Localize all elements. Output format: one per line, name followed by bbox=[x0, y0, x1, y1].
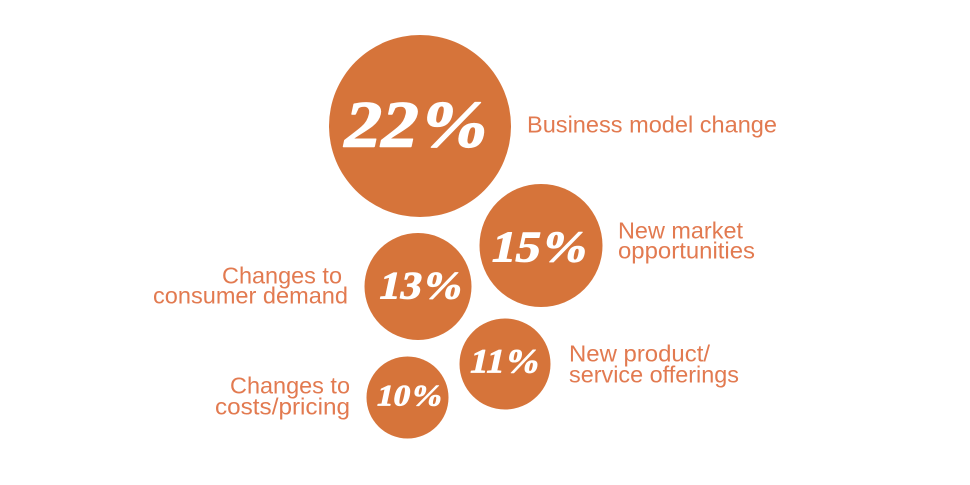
label: changes to consumer demand bbox=[153, 262, 348, 308]
label: changes to costs/pricing: costs/pricing bbox=[215, 394, 350, 420]
bubble: 10% changes to costs/pricing bbox=[366, 356, 448, 438]
bubble: 13% changes to consumer demand bbox=[364, 233, 472, 340]
label: business model change: Business model change bbox=[527, 112, 777, 138]
label: new market opportunities bbox=[618, 218, 755, 264]
label: new market opportunities: New market bbox=[618, 218, 744, 244]
bubble: 11% new product/service offerings bbox=[460, 318, 550, 410]
bubble: 11% new product/service offerings: 11% bbox=[466, 343, 545, 380]
bubble: 15% new market opportunities bbox=[480, 184, 602, 307]
label: changes to costs/pricing: Changes to bbox=[230, 372, 350, 398]
bubble: 13% changes to consumer demand: 13% bbox=[375, 264, 469, 307]
bubble: 22% business model change: 22% bbox=[337, 89, 500, 161]
label: new product/service offerings bbox=[569, 340, 739, 388]
label: changes to consumer demand: consumer demand bbox=[153, 282, 348, 308]
label: new product/service offerings: service offerings bbox=[569, 362, 739, 388]
label: changes to consumer demand: Changes to bbox=[222, 262, 342, 288]
label: changes to costs/pricing bbox=[215, 372, 350, 420]
label: new product/service offerings: New product/ bbox=[569, 340, 711, 366]
bubble: 22% business model change bbox=[329, 35, 511, 217]
label: new market opportunities: opportunities bbox=[618, 238, 755, 264]
bubble: 15% new market opportunities: 15% bbox=[487, 222, 595, 271]
bubble: 10% changes to costs/pricing: 10% bbox=[374, 379, 448, 412]
